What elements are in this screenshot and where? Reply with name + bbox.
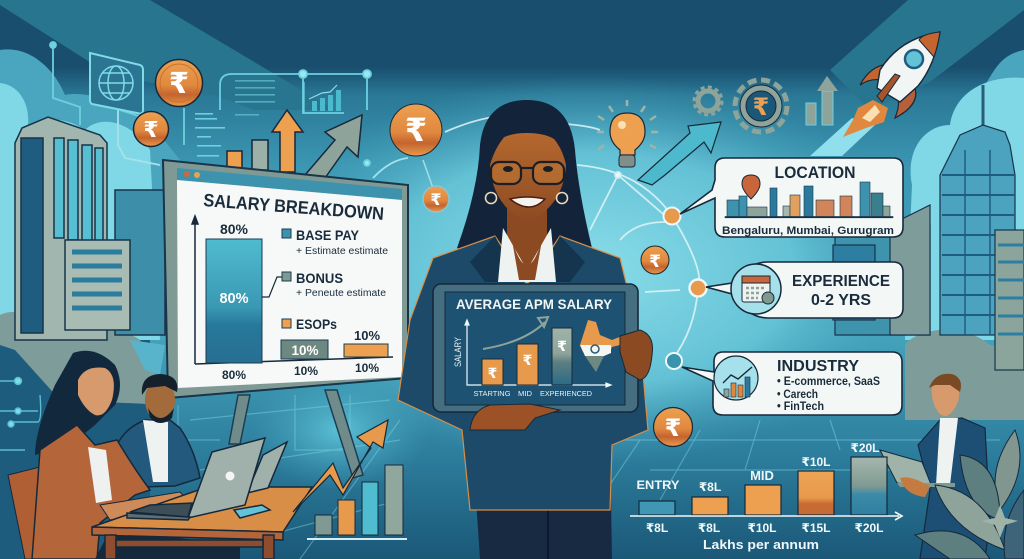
- easel legs: [229, 390, 363, 478]
- bar: esops 10%: 10%: [354, 328, 380, 343]
- panel: tablet average APM salary: [433, 284, 638, 412]
- bar: base pay 80%: 80%: [220, 221, 249, 237]
- coin: top left large: ₹: [169, 68, 189, 100]
- coin: right lower: ₹: [665, 415, 681, 442]
- labels above bars: ₹10L: [801, 455, 831, 469]
- mini bar chart near desk: [307, 465, 407, 540]
- arrow: x axis: [630, 512, 902, 520]
- labels below axis: ₹8L: [646, 521, 668, 535]
- icon: globe panel: [90, 53, 143, 114]
- heading: salary breakdown: SALARY BREAKDOWN: [203, 190, 385, 224]
- axis caption: Lakhs per annum: [703, 537, 819, 552]
- labels above bars: ₹20L: [850, 441, 880, 455]
- list: industries: • E-commerce, SaaS: [777, 376, 880, 388]
- node: industry: [666, 353, 682, 369]
- tablet axis labels: [474, 389, 593, 398]
- blazer: [398, 236, 648, 510]
- bar: starting: [482, 359, 503, 385]
- tablet axis labels: STARTING: [474, 389, 511, 398]
- coin: right mid: [641, 246, 669, 274]
- bar: base pay 80%: [206, 221, 262, 363]
- person: seated man: [117, 374, 200, 490]
- window dots: [184, 171, 210, 180]
- eyes: [503, 166, 553, 172]
- coin: right mid: ₹: [649, 252, 661, 271]
- legend: bonus: + Peneute estimate: [296, 288, 386, 299]
- shirt: [498, 228, 556, 282]
- arrow: tablet trend: [483, 317, 548, 349]
- mouth: [510, 197, 545, 207]
- map of India: [580, 320, 622, 372]
- icon: industry chart: [714, 356, 758, 400]
- person: man with laptop: [880, 374, 990, 559]
- bar: starting: ₹: [488, 365, 498, 381]
- plant: [915, 430, 1024, 559]
- bar: 20L: [851, 457, 887, 515]
- bar chart: lakhs per annum: [630, 441, 902, 552]
- tablet axis labels: MID: [518, 389, 533, 398]
- legend: base pay: [282, 227, 388, 257]
- labels below axis: ₹10L: [747, 521, 777, 535]
- arrow: blue rising: [638, 122, 721, 185]
- white network arcs: [445, 115, 699, 360]
- glasses: [491, 162, 564, 184]
- legend: esops: ESOPs: [296, 316, 337, 332]
- right background city buildings: [833, 85, 1024, 370]
- data text panel: [195, 80, 275, 157]
- left background city buildings: [15, 117, 165, 340]
- circuit lines top left: [50, 42, 408, 178]
- bar: experienced: ₹: [557, 338, 567, 354]
- tablet chart axes: [465, 320, 611, 387]
- icon: map pin: [742, 175, 760, 199]
- bar: experienced: [552, 328, 572, 385]
- panel: salary breakdown board: [163, 160, 408, 398]
- coin: top left small: [134, 112, 168, 146]
- panel: experience callout: [706, 262, 903, 318]
- icon: rupee gear: [735, 80, 787, 132]
- list: industries: [777, 376, 880, 413]
- legend: bonus: BONUS: [296, 270, 343, 286]
- floor perspective grid: [178, 395, 1000, 559]
- coin: upper centre large: ₹: [405, 112, 427, 148]
- bar: 8L: [692, 497, 728, 515]
- bar: bonus 10%: 10%: [291, 343, 319, 358]
- labels below axis: ₹8L: [698, 521, 720, 535]
- bar: mid: [745, 485, 781, 515]
- bar: esops 10%: [344, 328, 388, 357]
- bar labels: 10%: [294, 364, 318, 378]
- labels above bars: MID: [750, 468, 774, 483]
- person: seated woman: [8, 351, 240, 559]
- panel: location callout: [680, 158, 903, 237]
- bar: entry: [639, 501, 675, 515]
- connector: [262, 277, 282, 297]
- value: years: 0-2 YRS: [811, 292, 871, 309]
- face: [490, 133, 566, 223]
- labels below axis: ₹15L: [801, 521, 831, 535]
- bar: mid: [517, 344, 538, 385]
- arrow: orange zigzag growth: [293, 420, 388, 512]
- coin: top left large: [156, 60, 202, 106]
- panel: industry callout: [682, 352, 902, 415]
- pants: [472, 440, 612, 559]
- heading: industry: INDUSTRY: [777, 358, 859, 375]
- caption: cities: Bengaluru, Mumbai, Gurugram: [722, 225, 894, 237]
- heading: experience: EXPERIENCE: [792, 273, 890, 290]
- icon: calendar badge: [731, 264, 781, 314]
- icon: small gear: [694, 87, 722, 115]
- bar labels: 80%: [222, 368, 246, 382]
- left circuit lines over dark wall: [0, 378, 41, 450]
- legend: base pay: BASE PAY: [296, 227, 360, 243]
- icon: lightbulb: [597, 100, 658, 167]
- hair: [457, 100, 592, 262]
- bar: base pay 80%: 80%: [219, 291, 249, 307]
- legend: bonus: [282, 270, 386, 299]
- labels above bars: ENTRY: [636, 478, 680, 492]
- icon: rupee gear: ₹: [753, 94, 769, 121]
- node: location: [664, 208, 680, 224]
- icon: mini growth chart: [304, 82, 344, 113]
- heading: average APM salary: AVERAGE APM SALARY: [456, 296, 613, 312]
- top left bars and arrows behind the board: [227, 110, 362, 178]
- desk: [92, 487, 312, 559]
- hand: holding tablet bottom: [470, 404, 560, 430]
- list: industries: • FinTech: [777, 401, 824, 413]
- bar labels: [222, 361, 379, 382]
- node: experience: [690, 280, 706, 296]
- labels above bars: [636, 441, 880, 494]
- legend: esops: [282, 316, 337, 332]
- labels below axis: ₹20L: [854, 521, 884, 535]
- coin: top left small: ₹: [143, 117, 159, 142]
- coin: right lower: [654, 408, 692, 446]
- coin: upper centre small: ₹: [430, 192, 442, 209]
- coin: upper centre small: [423, 160, 449, 212]
- coin: upper centre large: [390, 104, 442, 156]
- heading: location: LOCATION: [774, 163, 856, 182]
- bar: 15L: [798, 471, 834, 515]
- icon: skyline: [725, 182, 893, 218]
- earrings: [486, 192, 568, 204]
- fringe: [490, 107, 567, 165]
- labels below axis: [646, 521, 884, 535]
- bar chart axes: [192, 216, 393, 364]
- tablet axis labels: EXPERIENCED: [540, 389, 593, 398]
- list: industries: • Carech: [777, 389, 818, 401]
- labels above bars: ₹8L: [699, 480, 721, 494]
- bar: mid: ₹: [523, 352, 533, 368]
- left background clouds: [0, 49, 180, 559]
- icon: bars with up arrow: [806, 76, 838, 125]
- bar labels: 10%: [355, 361, 379, 375]
- legend: base pay: + Estimate estimate: [296, 246, 388, 257]
- neck: [507, 205, 547, 275]
- axis label: salary: SALARY: [453, 337, 463, 367]
- icon: rocket: [810, 32, 940, 156]
- hand: holding tablet right: [620, 330, 652, 380]
- right background clouds: [905, 50, 1024, 420]
- bar: bonus 10%: [281, 340, 328, 359]
- person: presenter: [398, 100, 648, 559]
- laptops on desk: [127, 438, 287, 520]
